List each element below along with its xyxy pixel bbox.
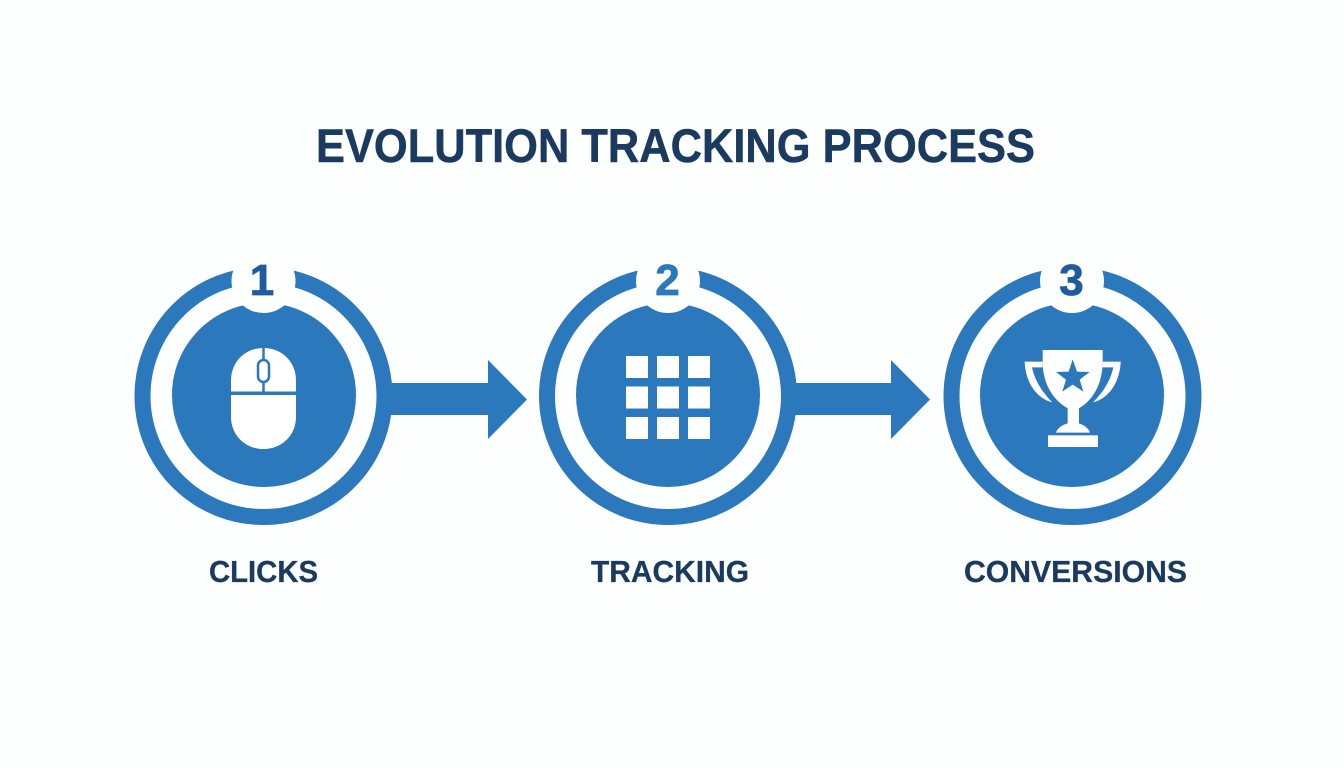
number badge 2 (636, 249, 700, 313)
disc 1 (172, 303, 356, 487)
ring 2 (547, 275, 789, 517)
icon: trophy (1025, 350, 1121, 447)
label: tracking: TRACKING (591, 554, 749, 589)
number badge 1 (232, 249, 296, 313)
ring 3 (952, 275, 1194, 517)
label: clicks: CLICKS (209, 554, 318, 589)
number badge 1: 1 (250, 256, 274, 305)
step 2: tracking (547, 249, 789, 517)
number badge 3: 3 (1059, 256, 1084, 305)
icon: mouse (231, 348, 296, 449)
label: conversions: CONVERSIONS (964, 554, 1187, 589)
ring 1 (142, 275, 384, 517)
title: EVOLUTION TRACKING PROCESS (316, 119, 1035, 172)
icon: grid (626, 356, 710, 439)
step 1: clicks (142, 249, 384, 517)
arrow: clicks to tracking (385, 360, 527, 439)
disc 2 (576, 303, 760, 487)
number badge 2: 2 (655, 256, 680, 305)
step 3: conversions (952, 249, 1194, 517)
disc 3 (980, 303, 1164, 487)
number badge 3 (1040, 249, 1104, 313)
arrow: tracking to conversions (790, 360, 930, 439)
